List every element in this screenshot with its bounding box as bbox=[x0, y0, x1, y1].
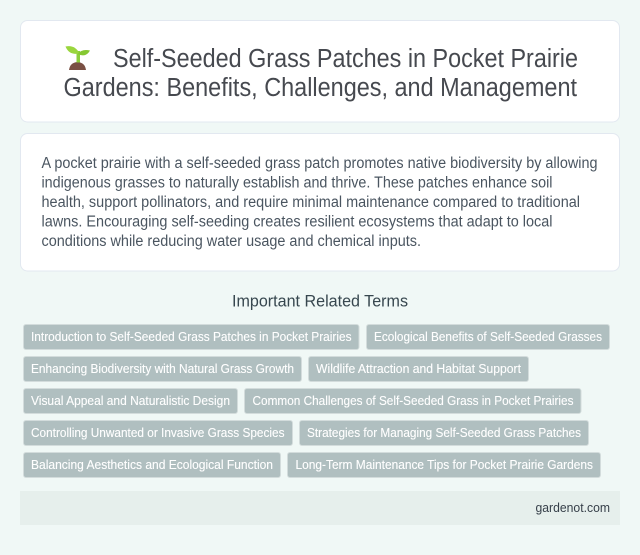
tag bbox=[288, 452, 600, 478]
text block: description: conditions while reducing water usage and chemical inputs. bbox=[42, 233, 421, 250]
text block: description: lawns. Encouraging self-seeding creates resilient ecosystems that adapt to local bbox=[42, 214, 552, 230]
text block: description: indigenous grasses to naturally establish and thrive. These patches enhance soil bbox=[42, 174, 552, 192]
title: Self-Seeded Grass Patches in Pocket Prairie bbox=[113, 45, 578, 73]
tag bbox=[300, 420, 588, 446]
tag: Wildlife Attraction and Habitat Support bbox=[316, 362, 522, 376]
tag bbox=[24, 324, 359, 350]
title: Gardens: Benefits, Challenges, and Management bbox=[64, 74, 577, 102]
tag bbox=[24, 356, 302, 382]
tag: Common Challenges of Self-Seeded Grass in Pocket Prairies bbox=[252, 394, 574, 408]
tag list: related terms bbox=[24, 324, 610, 478]
tag: Ecological Benefits of Self-Seeded Grasses bbox=[374, 330, 602, 344]
tag bbox=[24, 420, 292, 446]
tag bbox=[24, 452, 280, 478]
tag: Introduction to Self-Seeded Grass Patches in Pocket Prairies bbox=[31, 330, 352, 344]
tag bbox=[244, 388, 581, 414]
footer source text: gardenot.com bbox=[536, 501, 610, 515]
tag: Balancing Aesthetics and Ecological Function bbox=[31, 458, 273, 472]
tag: Controlling Unwanted or Invasive Grass Species bbox=[31, 426, 284, 440]
footer bbox=[20, 491, 620, 525]
tag: Long-Term Maintenance Tips for Pocket Prairie Gardens bbox=[296, 458, 593, 472]
heading: related terms: Important Related Terms bbox=[232, 292, 408, 310]
tag: Enhancing Biodiversity with Natural Grass Growth bbox=[31, 362, 294, 376]
tag bbox=[308, 356, 528, 382]
panel: description bbox=[20, 134, 620, 271]
tag: Visual Appeal and Naturalistic Design bbox=[31, 394, 230, 408]
text block: description: A pocket prairie with a self-seeded grass patch promotes native biodiversity by allowing bbox=[42, 155, 598, 172]
tag bbox=[24, 388, 238, 414]
title bbox=[64, 45, 578, 102]
panel: title card bbox=[20, 20, 620, 122]
tag bbox=[366, 324, 610, 350]
text block: description bbox=[42, 155, 598, 250]
text block: description: health, support pollinators, and require minimal maintenance compared to traditional bbox=[42, 194, 580, 211]
icon: sprout bbox=[66, 46, 90, 70]
tag: Strategies for Managing Self-Seeded Grass Patches bbox=[307, 426, 581, 440]
